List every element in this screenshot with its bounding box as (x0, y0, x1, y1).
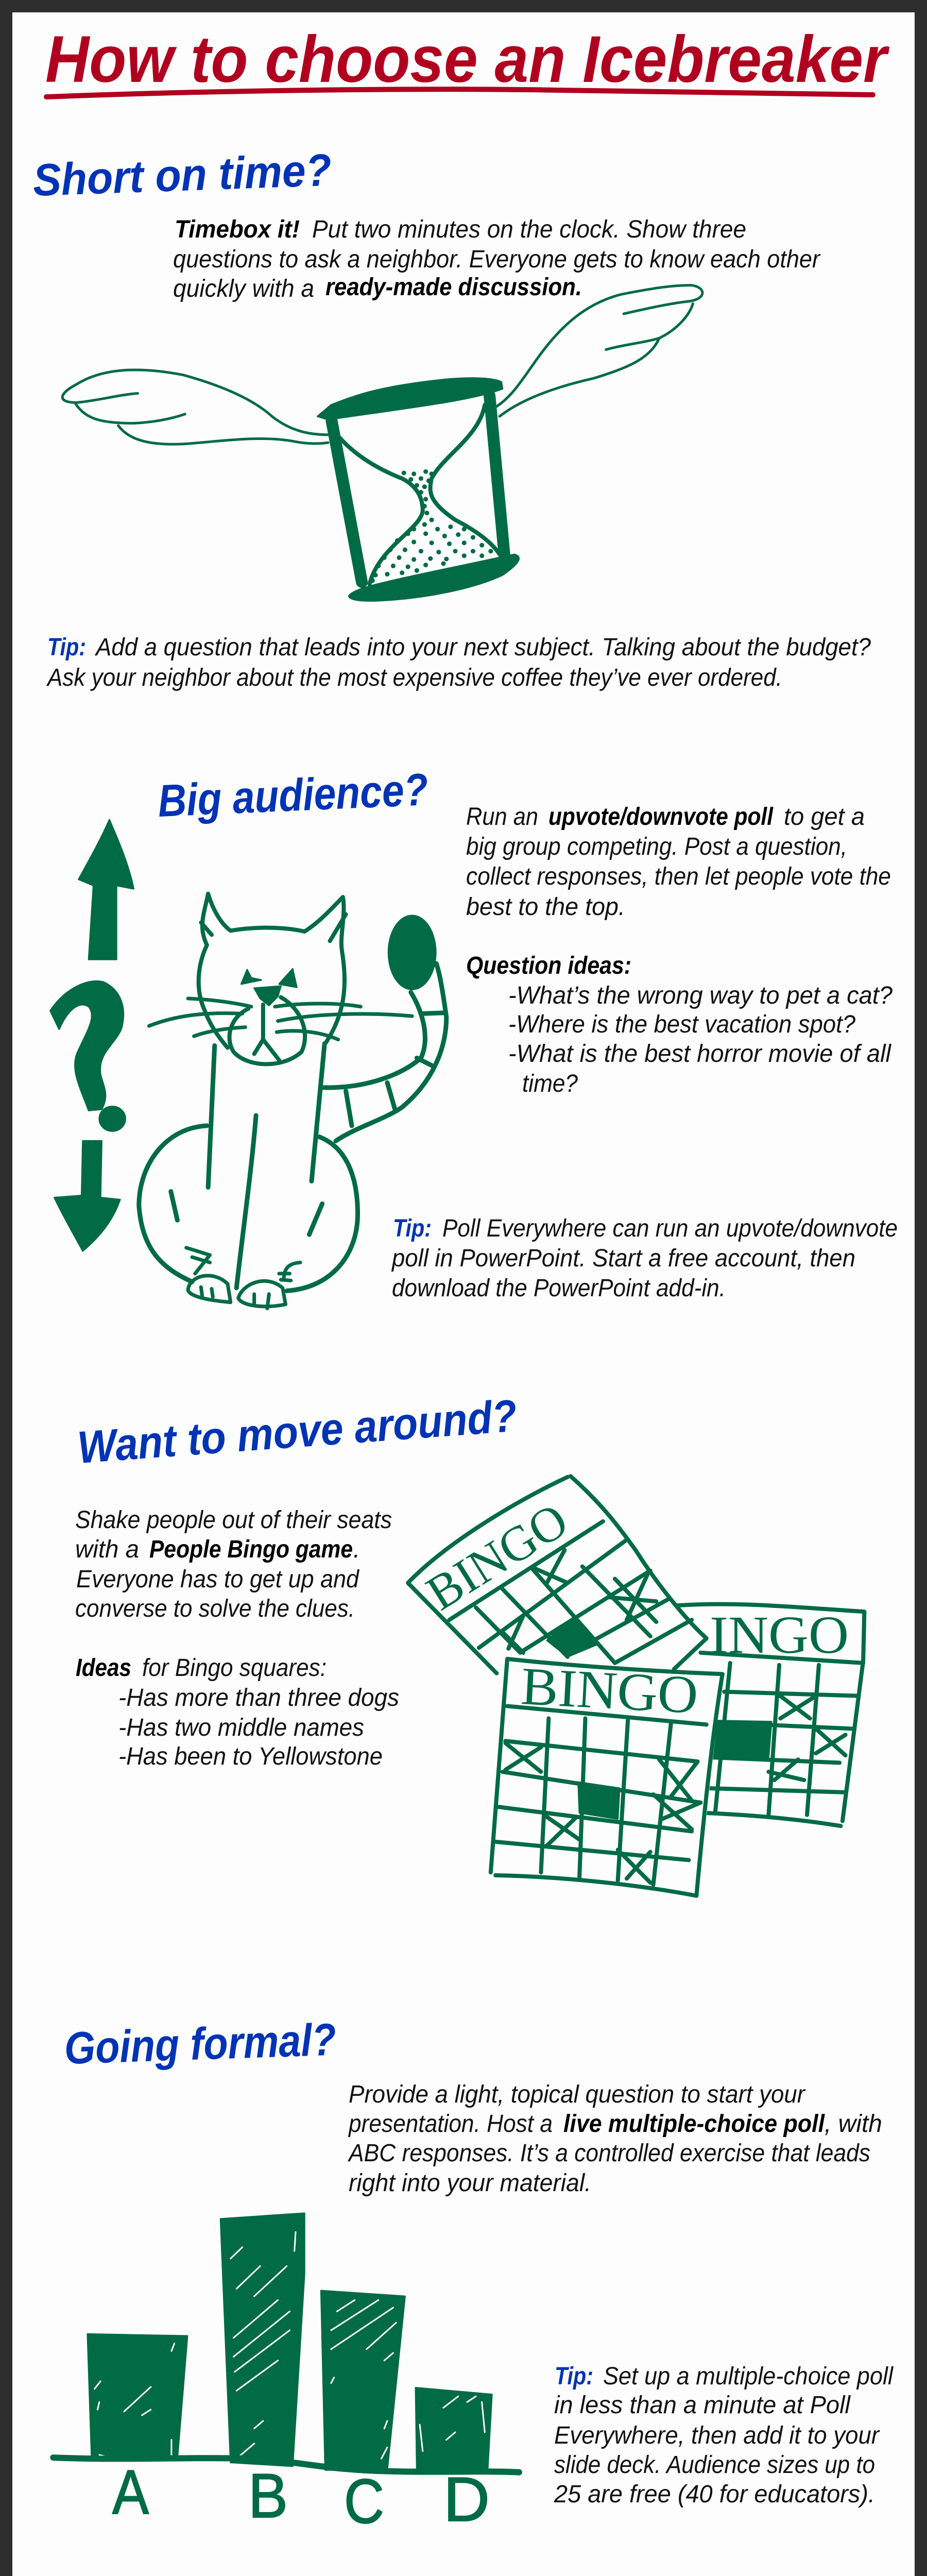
bingo card: front: BINGO (520, 1656, 699, 1725)
tip: Set up a multiple-choice poll (603, 2363, 894, 2390)
tip: in less than a minute at Poll (554, 2392, 851, 2419)
text block: people bingo: . (353, 1536, 360, 1563)
icon: cat (139, 894, 447, 1309)
tip: 25 are free (40 for educators). (554, 2481, 875, 2508)
text block: question ideas: Question ideas: (466, 952, 631, 979)
panel: going formal (53, 2014, 894, 2536)
tip: Add a question that leads into your next subject. Talking about the budget? (94, 634, 871, 661)
bar chart (53, 2213, 519, 2536)
text block: timebox: Timebox it! (175, 216, 300, 243)
bar A (88, 2334, 187, 2459)
bar D (416, 2387, 492, 2470)
text block: upvote poll: collect responses, then let people vote the (466, 863, 891, 890)
text block: ideas for bingo squares: -Has more than three dogs (118, 1684, 399, 1711)
text block: question ideas: -What is the best horror movie of all (508, 1040, 891, 1067)
tip: slide deck. Audience sizes up to (554, 2451, 875, 2479)
text block: question ideas: time? (522, 1070, 578, 1097)
icon: winged hourglass (62, 285, 702, 601)
axis labels (112, 2457, 490, 2536)
bar B (220, 2213, 304, 2466)
text block: people bingo: Everyone has to get up and (76, 1566, 359, 1593)
tip: Tip: (47, 634, 86, 661)
text block: ideas for bingo squares (76, 1654, 399, 1770)
heading: going formal: Going formal? (63, 2014, 337, 2074)
text block: multiple choice: Provide a light, topical question to start your (349, 2081, 806, 2108)
text block: timebox (173, 216, 821, 302)
tip (391, 1215, 898, 1302)
text block: people bingo (75, 1506, 392, 1622)
text block: timebox: questions to ask a neighbor. Everyone gets to know each other (173, 246, 821, 273)
panel: big audience (50, 764, 898, 1309)
text block: ideas for bingo squares: -Has been to Yellowstone (118, 1743, 383, 1770)
text block: multiple choice: presentation. Host a (348, 2110, 553, 2138)
tip (554, 2363, 894, 2508)
heading: want to move around: Want to move around? (76, 1390, 519, 1473)
bingo card: tilted: BINGO (417, 1492, 577, 1621)
heading: short on time: Short on time? (32, 144, 332, 206)
icon: up and down arrows with question mark (50, 820, 133, 1251)
bingo card: right (677, 1604, 864, 1826)
text block: multiple choice: right into your material. (349, 2170, 591, 2197)
text block: people bingo: Shake people out of their seats (75, 1506, 392, 1534)
text block: upvote poll: to get a (784, 803, 865, 831)
panel: short on time (32, 144, 871, 691)
text block: upvote poll: Run an (466, 803, 538, 831)
bar C (321, 2291, 405, 2470)
text block: timebox: Put two minutes on the clock. Show three (312, 216, 746, 243)
text block: timebox: ready-made discussion. (325, 274, 582, 301)
bingo card: front (491, 1656, 723, 1896)
text block: question ideas: -What’s the wrong way to pet a cat? (508, 982, 892, 1009)
heading: big audience: Big audience? (157, 764, 429, 826)
text block: question ideas: -Where is the best vacation spot? (508, 1011, 855, 1038)
text block: multiple choice: live multiple-choice poll (563, 2110, 826, 2138)
bingo card: tilted (408, 1476, 707, 1673)
text block: multiple choice (347, 2081, 882, 2197)
axis labels: C (344, 2466, 384, 2536)
text block: timebox: quickly with a (173, 275, 314, 302)
text block: people bingo: with a (75, 1536, 139, 1563)
tip: Everywhere, then add it to your (554, 2422, 880, 2449)
tip (46, 634, 871, 691)
text block: upvote poll: upvote/downvote poll (548, 803, 774, 831)
icon: bingo cards (408, 1476, 864, 1896)
text block: multiple choice: ABC responses. It’s a controlled exercise that leads (347, 2140, 870, 2167)
axis labels: D (443, 2464, 490, 2534)
text block: upvote poll: big group competing. Post a question, (466, 833, 847, 860)
tip: download the PowerPoint add-in. (392, 1275, 726, 1302)
text block: ideas for bingo squares: for Bingo squares: (142, 1654, 327, 1682)
tip: Poll Everywhere can run an upvote/downvote (442, 1215, 898, 1242)
text block: people bingo: converse to solve the clues. (75, 1595, 355, 1622)
text block: people bingo: People Bingo game (149, 1536, 353, 1563)
panel: want to move around (75, 1390, 864, 1896)
text block: ideas for bingo squares: -Has two middle names (118, 1714, 364, 1741)
text block: multiple choice: , with (825, 2110, 882, 2138)
text block: question ideas (466, 952, 892, 1097)
tip: Tip: (393, 1215, 432, 1242)
text block: ideas for bingo squares: Ideas (76, 1654, 131, 1682)
text block: upvote poll: best to the top. (466, 893, 625, 921)
axis labels: B (248, 2461, 288, 2531)
axis labels: A (112, 2457, 149, 2527)
tip: Tip: (555, 2363, 593, 2390)
tip: poll in PowerPoint. Start a free account, then (391, 1245, 855, 1272)
bingo card: right: INGO (710, 1605, 849, 1665)
text block: upvote poll (466, 803, 891, 921)
tip: Ask your neighbor about the most expensive coffee they’ve ever ordered. (46, 664, 782, 691)
